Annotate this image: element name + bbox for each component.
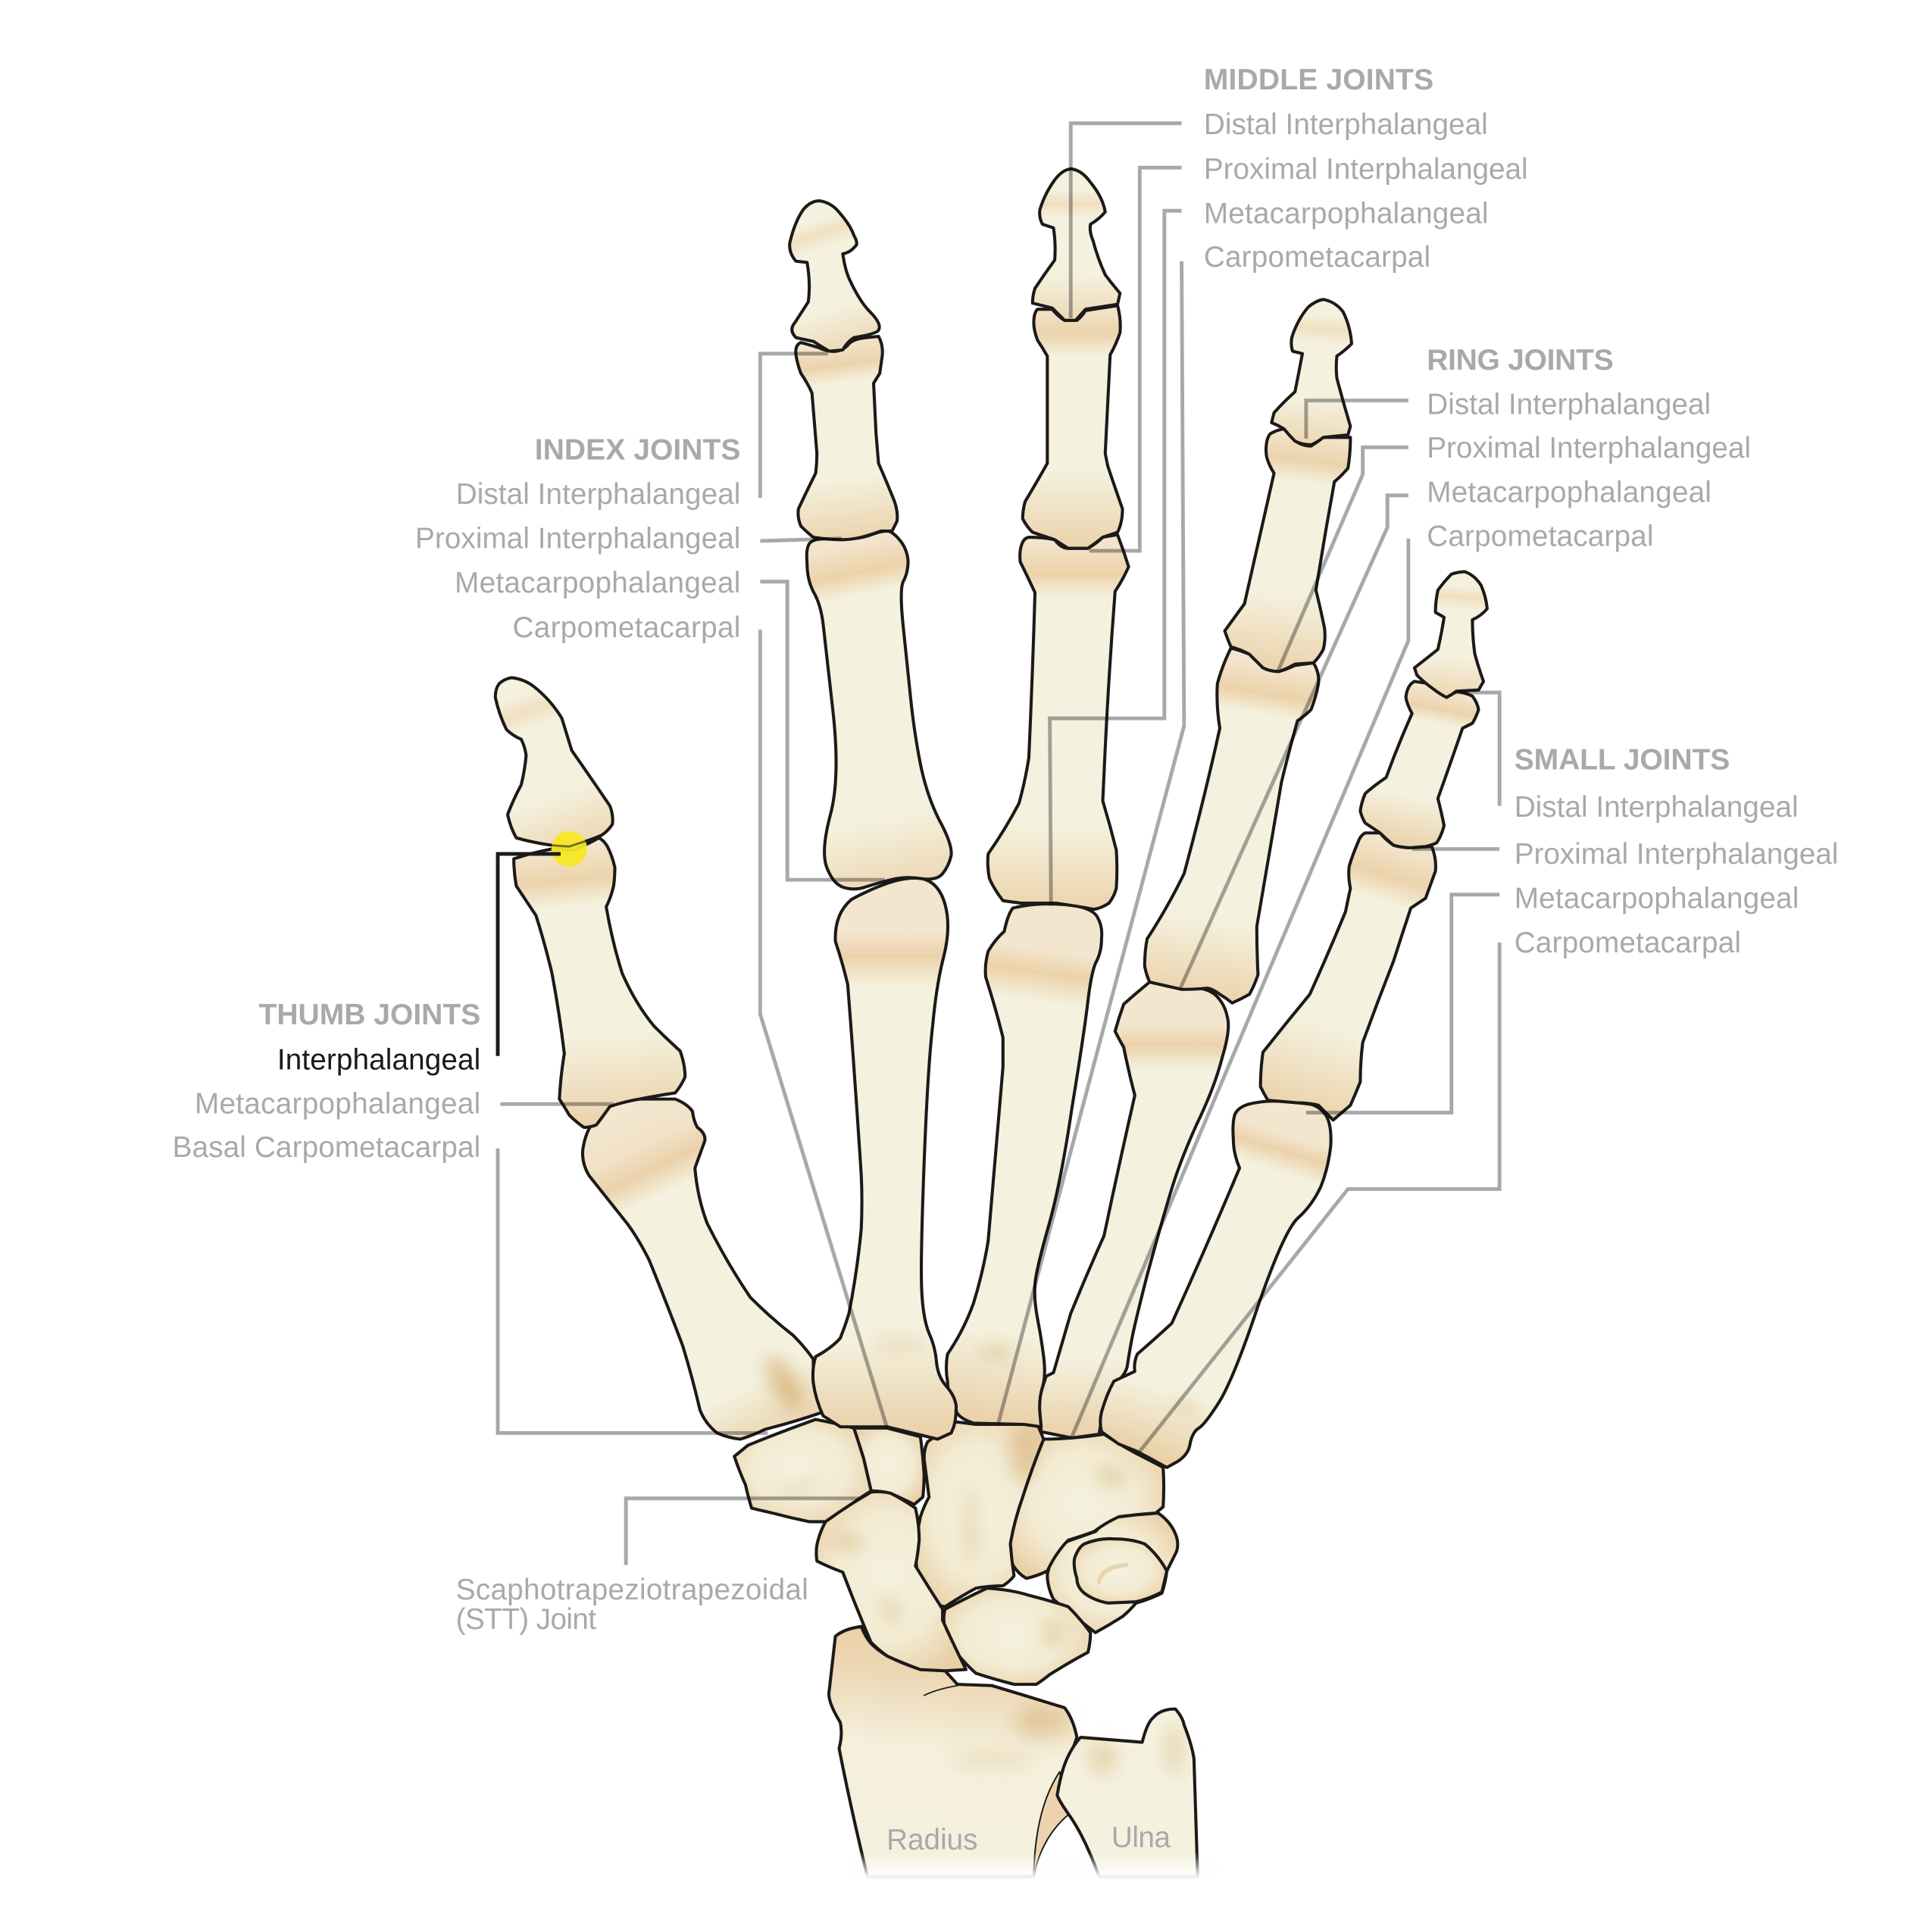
- heading: ring joints: RING JOINTS: [1427, 344, 1614, 377]
- labels: ring joints: [1427, 344, 1751, 552]
- joint line redrawn over highlight: [551, 839, 592, 846]
- label: highlighted: Interphalangeal: [277, 1044, 480, 1077]
- label: Proximal Interphalangeal: [1427, 432, 1751, 464]
- label: Carpometacarpal: [513, 611, 740, 644]
- heading: index joints: INDEX JOINTS: [535, 434, 740, 467]
- label: Carpometacarpal: [1515, 927, 1741, 959]
- label: Metacarpophalangeal: [1204, 197, 1489, 230]
- leader: middle carpometacarpal: [998, 261, 1184, 1424]
- leader lines: [498, 123, 1499, 1565]
- bone: trapezoid: [854, 1428, 924, 1505]
- bone: index proximal phalanx: [807, 531, 952, 889]
- label: Proximal Interphalangeal: [415, 523, 740, 555]
- bone: scaphoid: [816, 1492, 966, 1671]
- label: Carpometacarpal: [1427, 520, 1653, 552]
- label: Metacarpophalangeal: [1515, 883, 1799, 915]
- labels: thumb joints: [173, 999, 480, 1164]
- leader: index metacarpophalangeal: [760, 582, 885, 880]
- leader: small distal interphalangeal: [1454, 692, 1499, 806]
- label line 1: Scaphotrapeziotrapezoidal: [456, 1574, 808, 1606]
- bone: pisiform: [1074, 1539, 1167, 1603]
- label: ulna: Ulna: [1111, 1821, 1171, 1854]
- label: Distal Interphalangeal: [1515, 791, 1799, 824]
- bone: middle metacarpal: [946, 904, 1102, 1427]
- soft bone shading: [757, 1337, 1201, 1774]
- leader: thumb basal carpometacarpal: [498, 1149, 767, 1433]
- label: Distal Interphalangeal: [456, 478, 740, 511]
- leader: middle distal interphalangeal: [1071, 123, 1182, 318]
- labels: index joints: [415, 434, 740, 644]
- bone: ring proximal phalanx: [1145, 648, 1318, 1003]
- bone: radius surface line: [924, 1686, 958, 1696]
- leader: small metacarpophalangeal: [1306, 895, 1499, 1113]
- bone: hamate: [1009, 1434, 1164, 1578]
- label: STT joint: [456, 1574, 808, 1636]
- bone: lunate: [944, 1588, 1090, 1684]
- leader: index carpometacarpal: [760, 630, 887, 1428]
- bone: index distal phalanx: [789, 201, 880, 351]
- labels: middle joints: [1204, 64, 1528, 274]
- leader: ring carpometacarpal: [1072, 539, 1408, 1436]
- bone: thumb metacarpal: [583, 1099, 823, 1439]
- leader: index proximal interphalangeal: [760, 539, 842, 541]
- bone: ring middle phalanx: [1225, 429, 1350, 671]
- bone: small distal phalanx: [1415, 572, 1487, 697]
- leader: ring proximal interphalangeal: [1277, 447, 1408, 671]
- bone: ring metacarpal: [1039, 982, 1228, 1438]
- bone: small proximal phalanx: [1261, 833, 1436, 1120]
- leader: ring distal interphalangeal: [1306, 401, 1408, 439]
- bone: middle middle phalanx: [1023, 305, 1123, 549]
- bone: small middle phalanx: [1360, 681, 1479, 848]
- bone: ulna: [1057, 1709, 1198, 1877]
- label: Carpometacarpal: [1204, 241, 1430, 274]
- bone: middle distal phalanx: [1033, 169, 1120, 320]
- leader: thumb interphalangeal (highlighted): [498, 854, 561, 1056]
- bone: trapezium: [734, 1419, 871, 1521]
- labels: small joints: [1515, 744, 1838, 959]
- fade at forearm bottom: [850, 1852, 1220, 1885]
- leader: thumb metacarpophalangeal: [500, 1103, 614, 1105]
- bone: index middle phalanx: [796, 336, 897, 539]
- fade solid: [850, 1877, 1220, 1885]
- label: radius: Radius: [886, 1824, 978, 1856]
- label: Proximal Interphalangeal: [1515, 838, 1838, 871]
- leader: small proximal interphalangeal: [1412, 848, 1499, 850]
- highlight: interphalangeal joint yellow dot: [552, 831, 587, 867]
- bone: thumb proximal phalanx: [514, 838, 685, 1127]
- label: Metacarpophalangeal: [455, 567, 740, 599]
- leader: index distal interphalangeal: [760, 354, 828, 498]
- label: Distal Interphalangeal: [1204, 108, 1488, 141]
- leader: small carpometacarpal: [1140, 943, 1499, 1452]
- label: Metacarpophalangeal: [1427, 477, 1712, 509]
- heading: middle joints: MIDDLE JOINTS: [1204, 64, 1433, 96]
- fade gradient: [850, 1852, 1220, 1877]
- bone: middle proximal phalanx: [988, 535, 1129, 909]
- bone: capitate: [915, 1422, 1043, 1607]
- label: Metacarpophalangeal: [195, 1087, 480, 1120]
- bone: triquetrum: [1047, 1513, 1177, 1633]
- label line 2: (STT) Joint: [456, 1603, 596, 1636]
- bone: pisiform inner ridge: [1099, 1565, 1126, 1582]
- hand skeleton illustration: [496, 169, 1487, 1877]
- leader: ring metacarpophalangeal: [1180, 496, 1408, 988]
- bone: radius: [829, 1627, 1077, 1877]
- bone: index metacarpal: [813, 878, 956, 1439]
- heading: thumb joints: THUMB JOINTS: [259, 999, 480, 1031]
- bone: thumb distal phalanx: [496, 677, 613, 846]
- label: Distal Interphalangeal: [1427, 388, 1711, 420]
- label: Proximal Interphalangeal: [1204, 153, 1528, 186]
- bone: small metacarpal: [1100, 1101, 1331, 1468]
- bone: ring distal phalanx: [1271, 299, 1352, 445]
- heading: small joints: SMALL JOINTS: [1515, 744, 1730, 777]
- label: Basal Carpometacarpal: [173, 1131, 480, 1164]
- leader: scaphotrapeziotrapezoidal: [626, 1499, 859, 1565]
- leader: middle proximal interphalangeal: [1089, 167, 1182, 551]
- bone: radius inner contour: [1033, 1772, 1070, 1875]
- leader: middle metacarpophalangeal: [1050, 211, 1182, 905]
